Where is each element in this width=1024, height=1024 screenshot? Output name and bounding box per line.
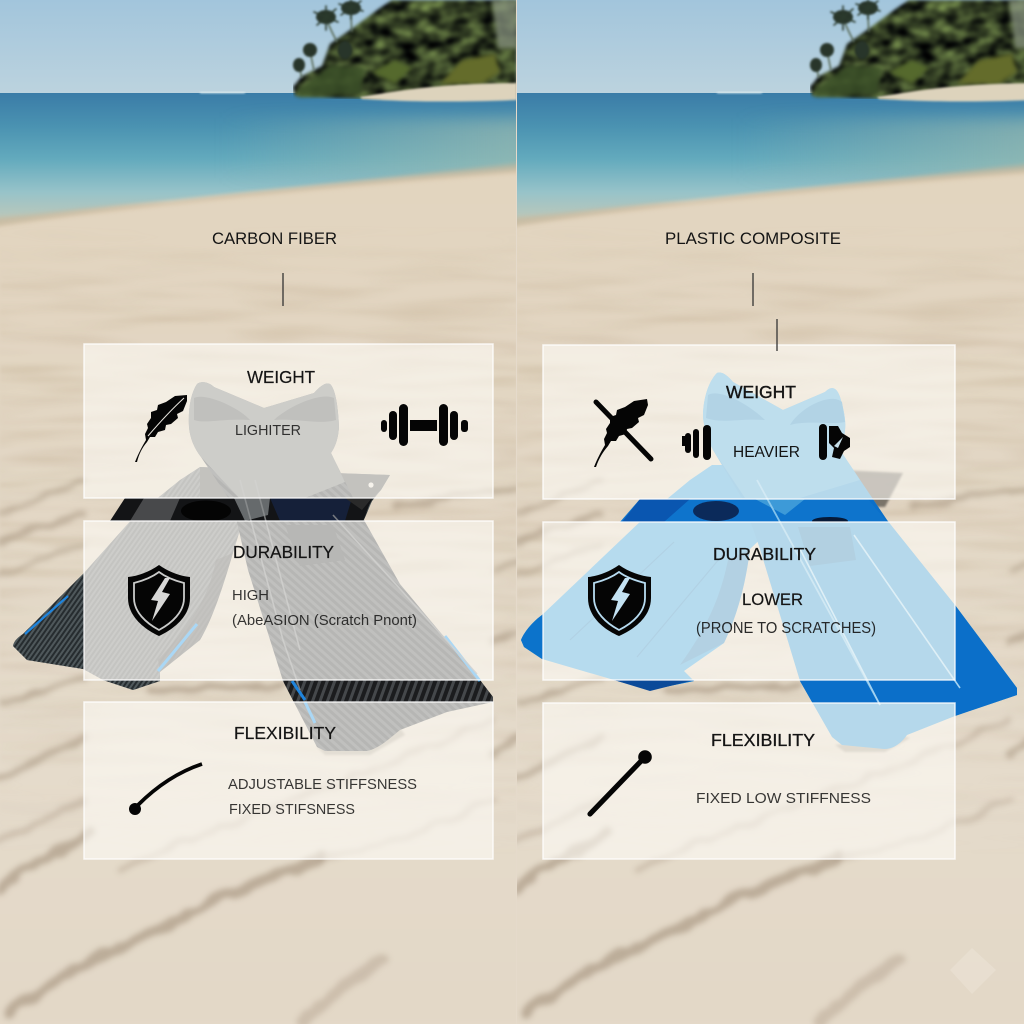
icon: dumbbell <box>381 404 468 446</box>
background: left beach scene <box>0 0 530 1024</box>
heading: durability: DURABILITY <box>233 542 334 562</box>
icon: feather <box>135 395 187 462</box>
plastic composite fins photo <box>521 373 1017 752</box>
panel: carbon fiber flexibility <box>84 702 493 859</box>
label: abrasion: (AbeASION (Scratch Pnont) <box>232 612 417 629</box>
label: heavier: HEAVIER <box>733 444 800 461</box>
panel: plastic flexibility <box>543 703 955 859</box>
sparkle watermark <box>950 948 996 994</box>
label: lower: LOWER <box>742 590 803 609</box>
fin shadows <box>835 735 910 752</box>
shadow below left fin <box>317 728 405 755</box>
fin outside-panel dark portions <box>13 498 493 702</box>
label: fixed low stiffness: FIXED LOW STIFFNESS <box>696 790 871 807</box>
icon: shield <box>588 565 651 636</box>
icon: crossed-out feather <box>594 399 651 467</box>
title: plastic composite: PLASTIC COMPOSITE <box>665 229 841 248</box>
heading: weight: WEIGHT <box>726 382 796 402</box>
connector: carbon fiber <box>282 273 284 306</box>
panel: carbon fiber weight <box>84 344 493 498</box>
fin outside-panel deep-blue portions <box>521 499 1017 716</box>
heading: flexibility: FLEXIBILITY <box>234 723 336 743</box>
icon: dumbbell left half <box>682 425 711 460</box>
panel: carbon fiber durability <box>84 521 493 680</box>
label: prone to scratches: (PRONE TO SCRATCHES) <box>696 620 876 637</box>
icon: stiff line <box>590 750 652 814</box>
background: right beach scene <box>507 0 1024 1024</box>
heading: durability: DURABILITY <box>713 544 816 564</box>
connector: plastic composite lower <box>776 319 778 351</box>
heading: weight: WEIGHT <box>247 367 315 387</box>
accent stripes <box>25 596 480 723</box>
connector: plastic composite upper <box>752 273 754 306</box>
fin blade ribs <box>570 480 960 705</box>
icon: flexible curve <box>129 764 202 815</box>
label: adjustable stiffness: ADJUSTABLE STIFFSNESS <box>228 776 417 793</box>
carbon fiber fins photo <box>13 382 493 755</box>
blade ribs <box>240 480 477 690</box>
label: fixed stiffness: FIXED STIFSNESS <box>229 801 355 818</box>
label: high: HIGH <box>232 587 269 604</box>
icon: shield <box>128 565 190 636</box>
heading: flexibility: FLEXIBILITY <box>711 730 815 750</box>
title: carbon fiber: CARBON FIBER <box>212 229 337 248</box>
icon: dumbbell right half <box>819 424 850 460</box>
panel: plastic durability <box>543 522 955 680</box>
panel: plastic weight <box>543 345 955 499</box>
label: lighter: LIGHITER <box>235 422 301 439</box>
